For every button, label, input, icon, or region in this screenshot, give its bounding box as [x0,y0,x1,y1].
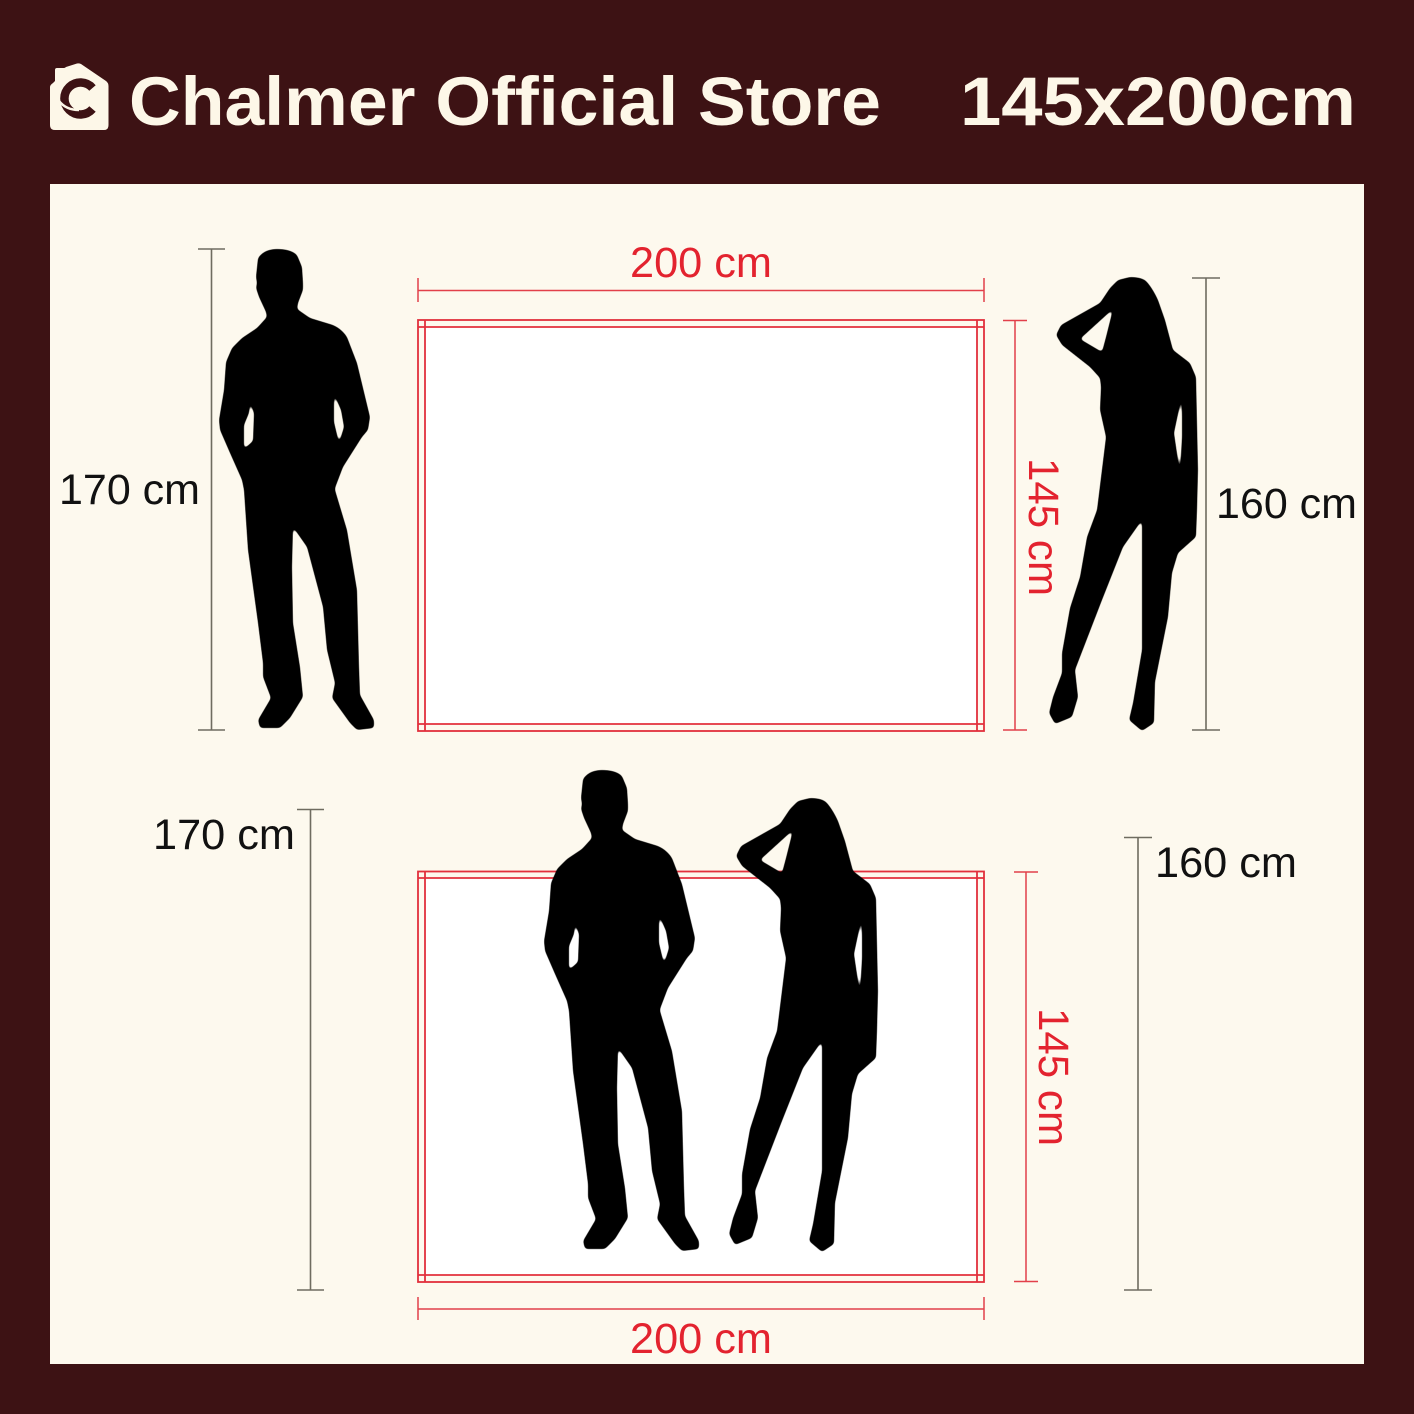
height dimension: 145 cm [1029,1008,1077,1146]
man height scale: 170 cm [59,466,200,514]
width dimension [418,1297,984,1363]
height dimension [1014,872,1077,1282]
size heading: 145x200cm [960,63,1356,140]
woman height scale [1124,838,1297,1290]
woman height scale: 160 cm [1216,480,1357,528]
woman silhouette [1049,277,1198,731]
man height scale [153,810,324,1290]
man silhouette [219,249,374,730]
blanket outline [418,320,984,731]
height dimension: 145 cm [1019,458,1067,596]
height dimension [1003,320,1067,730]
width dimension: 200 cm [630,239,772,287]
woman silhouette [729,798,878,1252]
woman height scale [1192,278,1357,730]
panel: size comparison [50,184,1364,1364]
panel: bottom diagram [153,770,1297,1363]
man height scale: 170 cm [153,811,295,859]
panel: top diagram [59,239,1357,731]
man silhouette [544,770,699,1251]
woman height scale: 160 cm [1155,839,1297,887]
man height scale [59,249,225,730]
title: Chalmer Official Store [129,63,881,140]
width dimension: 200 cm [630,1315,772,1363]
blanket outline [418,872,984,1282]
icon: house logo [50,63,108,130]
header [50,63,1356,140]
width dimension [418,239,984,302]
